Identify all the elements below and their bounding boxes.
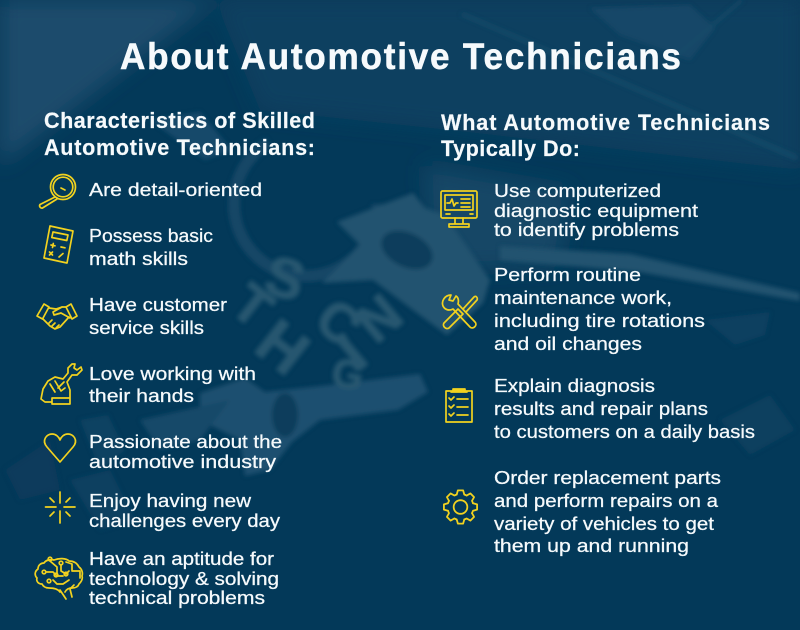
icon: gear xyxy=(444,490,477,524)
icon: magnifying glass xyxy=(40,174,76,208)
text: routine maintenance xyxy=(494,265,705,354)
text: passionate: Passionate about the xyxy=(89,432,282,452)
background photo of tools: T xyxy=(221,272,284,340)
text: detail-oriented: Are detail-oriented xyxy=(89,180,262,200)
text: replacement parts xyxy=(494,468,721,556)
right heading: Typically Do: xyxy=(441,136,580,161)
left column: characteristics xyxy=(35,108,315,608)
background photo of tools: C xyxy=(305,287,372,358)
text: customer service: Have customer xyxy=(89,295,227,315)
text: routine maintenance: Perform routine xyxy=(494,265,641,285)
text: explain diagnosis: Explain diagnosis xyxy=(494,376,655,396)
background photo of tools: S xyxy=(259,243,311,313)
icon: clipboard checklist xyxy=(446,389,472,422)
lower wrench xyxy=(200,374,428,476)
text: diagnostic equipment: to identify problems xyxy=(494,220,679,240)
text: working with hands xyxy=(89,364,256,406)
text: explain diagnosis: results and repair plans xyxy=(494,399,708,419)
text: explain diagnosis xyxy=(494,376,755,442)
text: new challenges: challenges every day xyxy=(89,511,280,531)
text: aptitude for technology: Have an aptitude for xyxy=(89,549,274,569)
text: new challenges xyxy=(89,491,280,531)
right heading xyxy=(441,110,770,161)
icon: hand holding wrench xyxy=(41,364,82,404)
text: customer service xyxy=(89,295,227,338)
upper wrench xyxy=(322,193,490,335)
text: replacement parts: Order replacement parts xyxy=(494,468,721,488)
text: working with hands: their hands xyxy=(89,386,194,406)
text: diagnostic equipment: Use computerized xyxy=(494,181,661,201)
text: working with hands: Love working with xyxy=(89,364,256,384)
text: replacement parts: and perform repairs on a xyxy=(494,491,719,511)
text: routine maintenance: and oil changes xyxy=(494,334,642,354)
text: math skills xyxy=(89,226,213,269)
text: routine maintenance: maintenance work, xyxy=(494,288,672,308)
text: replacement parts: them up and running xyxy=(494,536,689,556)
text: passionate xyxy=(89,432,282,472)
text: diagnostic equipment: diagnostic equipment xyxy=(494,201,698,221)
icon: diagnostic computer xyxy=(441,191,477,227)
text: explain diagnosis: to customers on a daily basis xyxy=(494,422,755,442)
icon: sparkle xyxy=(46,492,75,523)
text: aptitude for technology xyxy=(89,549,279,608)
text: customer service: service skills xyxy=(89,318,204,338)
text: diagnostic equipment xyxy=(494,181,698,240)
title: About Automotive Technicians xyxy=(120,35,681,77)
icon: crossed wrench and screwdriver xyxy=(442,295,477,329)
background photo of tools: N xyxy=(345,283,414,354)
text: new challenges: Enjoy having new xyxy=(89,491,252,511)
background photo of tools: H xyxy=(243,307,321,389)
left heading: Characteristics of Skilled xyxy=(44,108,315,133)
icon: handshake xyxy=(37,304,77,329)
right column: typical duties xyxy=(441,110,770,556)
text: replacement parts: variety of vehicles to get xyxy=(494,514,714,534)
text: routine maintenance: including tire rotations xyxy=(494,311,705,331)
left heading xyxy=(44,108,315,160)
background photo of tools: G xyxy=(328,351,367,399)
background photo of tools: I xyxy=(325,322,379,382)
text: passionate: automotive industry xyxy=(89,452,276,472)
left heading: Automotive Technicians: xyxy=(44,135,315,160)
text: aptitude for technology: technology & solving xyxy=(89,569,279,589)
right heading: What Automotive Technicians xyxy=(441,110,770,135)
icon: brain circuit xyxy=(35,557,82,599)
text: aptitude for technology: technical problems xyxy=(89,588,265,608)
icon: calculator xyxy=(44,226,73,263)
text: math skills: math skills xyxy=(89,249,188,269)
icon: heart xyxy=(44,434,76,462)
text: math skills: Possess basic xyxy=(89,226,213,246)
